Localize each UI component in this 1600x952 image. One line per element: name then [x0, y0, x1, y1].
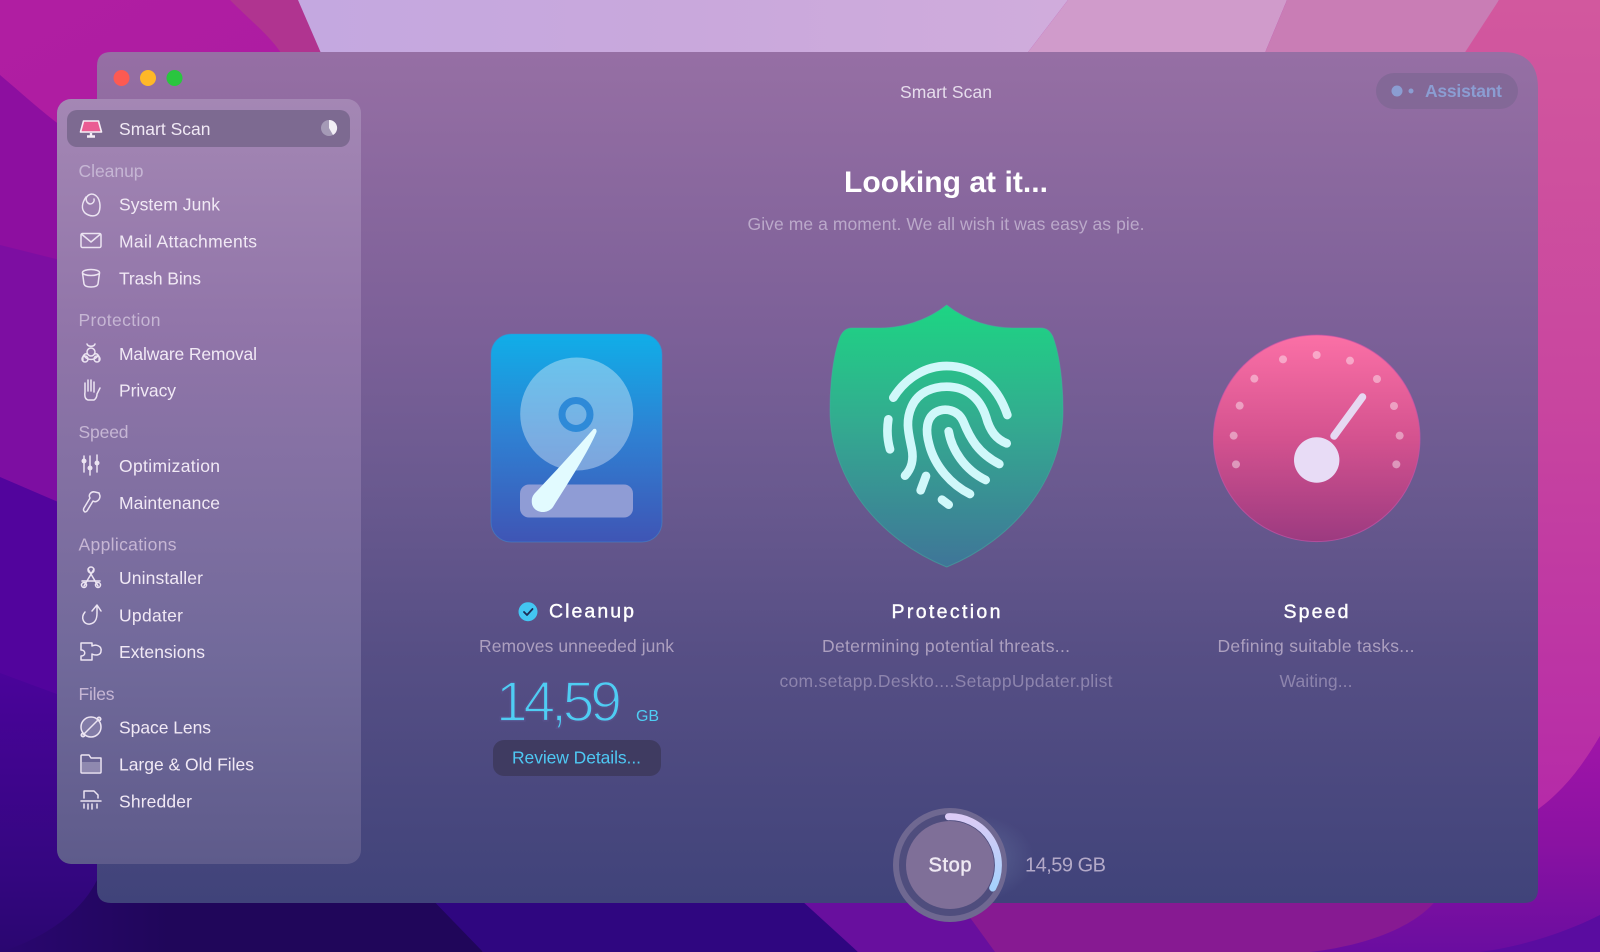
- sidebar heading: Applications: Applications: [78, 535, 177, 555]
- stop button with progress ring: Stop: [928, 855, 972, 877]
- item: Maintenance: Maintenance: [119, 493, 220, 513]
- item: Extensions: [81, 642, 205, 662]
- icon: hard drive: [491, 334, 662, 542]
- item: Updater: Updater: [119, 606, 183, 626]
- assistant pill: Assistant: [1425, 81, 1502, 101]
- scanned total: 14,59 GB: [1025, 855, 1106, 877]
- item: Extensions: Extensions: [119, 642, 205, 662]
- heading: Looking at it...: [844, 166, 1048, 199]
- item: Space Lens: Space Lens: [119, 718, 211, 738]
- item: Mail Attachments: Mail Attachments: [119, 232, 257, 252]
- speed description: Defining suitable tasks...: [1218, 636, 1414, 656]
- item: Privacy: Privacy: [119, 381, 176, 401]
- item: Malware Removal: Malware Removal: [119, 344, 257, 364]
- selected row: Smart Scan: Smart Scan: [119, 119, 210, 139]
- panel: protection column: [780, 305, 1113, 691]
- item: Space Lens: [81, 717, 211, 738]
- item: Optimization: [82, 455, 220, 476]
- icon: shield with fingerprint: [830, 305, 1063, 567]
- subtitle: Give me a moment. We all wish it was easy as pie.: [748, 214, 1144, 234]
- sidebar heading: Cleanup: Cleanup: [78, 161, 144, 181]
- item: Optimization: Optimization: [119, 456, 220, 476]
- cleanup title with check: Cleanup: [549, 601, 634, 623]
- item: Privacy: [85, 380, 176, 401]
- stop button with progress ring: [896, 811, 1034, 919]
- item: Shredder: [81, 791, 192, 812]
- item: Large & Old Files: Large & Old Files: [119, 755, 254, 775]
- cleanup size unit: GB: [636, 708, 659, 725]
- review details button: Review Details...: [512, 748, 641, 768]
- protection current file: com.setapp.Deskto....SetappUpdater.plist: [780, 671, 1113, 691]
- panel: sidebar: [57, 99, 361, 864]
- sidebar heading: Protection: Protection: [78, 310, 160, 330]
- icon: speed gauge: [1213, 335, 1420, 542]
- cleanup description: Removes unneeded junk: [479, 636, 674, 656]
- panel: cleanup column: [479, 334, 674, 776]
- protection description: Determining potential threats...: [822, 636, 1070, 656]
- item: Updater: [83, 605, 183, 626]
- item: System Junk: System Junk: [119, 194, 220, 214]
- window title: Smart Scan: [900, 82, 992, 102]
- assistant pill: [1376, 73, 1518, 109]
- speed title: Speed: [1284, 601, 1348, 623]
- item: Maintenance: [84, 492, 220, 513]
- item: System Junk: [82, 194, 220, 216]
- item: Uninstaller: [82, 567, 203, 588]
- panel: speed column: [1213, 335, 1420, 691]
- selected row: Smart Scan: [67, 110, 350, 147]
- speed status: Waiting...: [1280, 671, 1352, 691]
- window controls: [114, 70, 182, 86]
- sidebar heading: Speed: Speed: [78, 422, 128, 442]
- cleanup size value: 14,59: [496, 670, 622, 734]
- item: Shredder: Shredder: [119, 792, 192, 812]
- protection title: Protection: [892, 601, 1000, 623]
- item: Trash Bins: Trash Bins: [119, 269, 201, 289]
- sidebar heading: Files: Files: [78, 684, 115, 704]
- review details button: [493, 740, 661, 776]
- item: Uninstaller: Uninstaller: [119, 568, 203, 588]
- item: Trash Bins: [82, 269, 201, 289]
